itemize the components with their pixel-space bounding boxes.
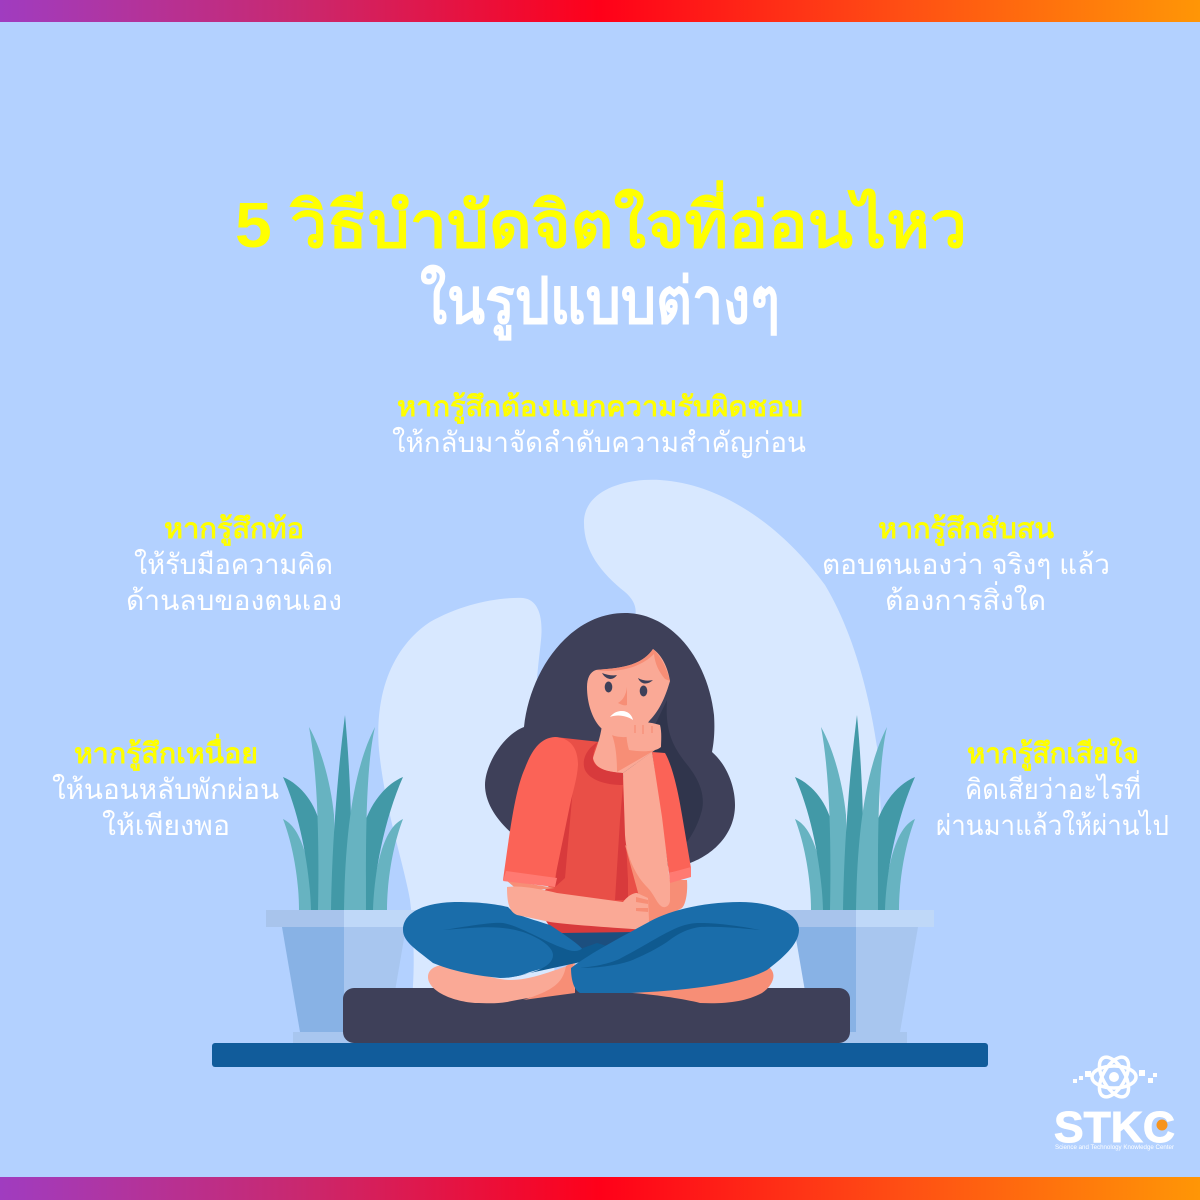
face (587, 649, 670, 737)
text block: responsibility: หากรู้สึกต้องแบกความรับผิดชอบ (397, 391, 803, 424)
collar (584, 742, 623, 785)
hair fringe shading (596, 649, 670, 681)
subtitle: ในรูปแบบต่างๆ (420, 264, 780, 341)
waist skin and back arm (625, 845, 687, 925)
orange dot (1156, 1120, 1168, 1130)
text block: sad: คิดเสียว่าอะไรที่ (965, 770, 1141, 805)
nose (618, 687, 627, 705)
left plant and pot (266, 715, 422, 1043)
text block: confused: ตอบตนเองว่า จริงๆ แล้ว (822, 549, 1110, 580)
text block: tired (52, 733, 279, 841)
icon: atom (1092, 1052, 1136, 1102)
title: 5 วิธีบำบัดจิตใจที่อ่อนไหว (235, 180, 967, 261)
bottom gradient bar (0, 1177, 1200, 1200)
girl illustration (403, 613, 799, 1003)
text block: tired: หากรู้สึกเหนื่อย (74, 733, 258, 771)
floor (212, 1043, 988, 1067)
right plant and pot (778, 715, 934, 1043)
left sleeve (503, 737, 578, 880)
hair (485, 613, 735, 870)
hair shadow (650, 700, 703, 842)
feet (620, 966, 773, 1003)
text block: confused: ต้องการสิ่งใด (885, 581, 1046, 616)
hand under chin (626, 722, 661, 751)
text block: confused: หากรู้สึกสับสน (878, 513, 1054, 546)
STKC logo (1054, 1052, 1175, 1152)
wordmark: STKC (1054, 1103, 1175, 1152)
text block: responsibility: ให้กลับมาจัดลำดับความสำคัญก่อน (392, 426, 806, 458)
text block: discouraged: หากรู้สึกท้อ (164, 513, 304, 546)
icon: pixel squares (1073, 1070, 1157, 1083)
eyes and brows (602, 673, 653, 696)
mouth (610, 711, 633, 720)
text block: sad: หากรู้สึกเสียใจ (967, 737, 1139, 771)
text block: tired: ให้นอนหลับพักผ่อน (52, 773, 279, 805)
tagline: Science and Technology Knowledge Center (1055, 1145, 1174, 1151)
lower forearm (507, 886, 649, 930)
right sleeve (652, 752, 691, 873)
text block: sad: ผ่านมาแล้วให้ผ่านไป (936, 809, 1169, 841)
legs (560, 932, 640, 952)
text block: discouraged (126, 513, 342, 616)
text block: responsibility (392, 391, 806, 458)
background blobs (378, 480, 882, 1043)
text block: discouraged: ด้านลบของตนเอง (126, 585, 342, 616)
text block: tired: ให้เพียงพอ (102, 809, 230, 841)
text block: sad (936, 737, 1169, 841)
top gradient bar (0, 0, 1200, 22)
text block: confused (822, 513, 1110, 616)
raised forearm (623, 752, 670, 907)
text block: discouraged: ให้รับมือความคิด (134, 548, 333, 580)
shirt body (520, 737, 640, 915)
meditation cushion (343, 988, 850, 1043)
neck (593, 725, 655, 773)
